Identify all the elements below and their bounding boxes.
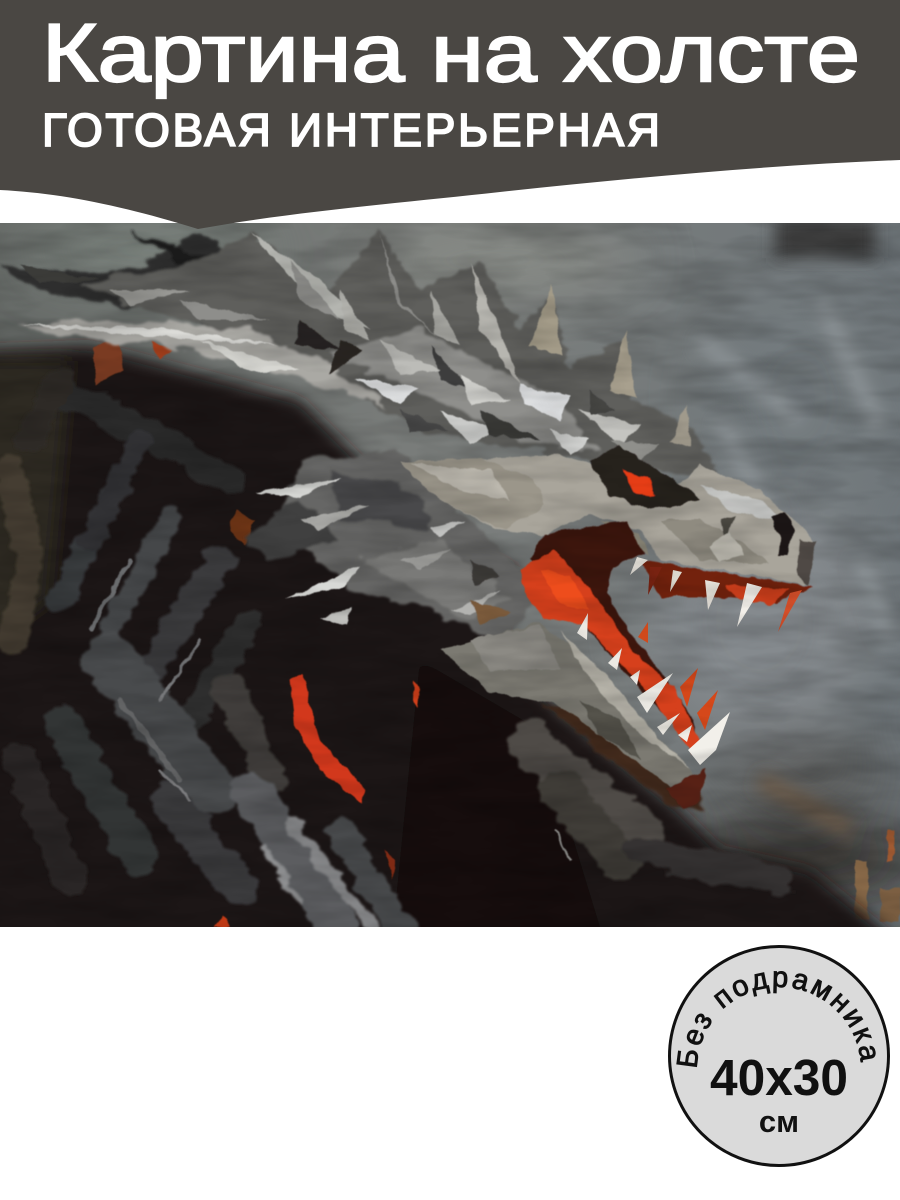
badge unit: см [759, 1104, 799, 1139]
teeth [577, 557, 802, 765]
crest and horns [0, 232, 720, 475]
fire glow in body [95, 340, 420, 927]
painting: dragon on canvas [0, 215, 900, 960]
nostril [770, 512, 794, 555]
subtitle: ГОТОВАЯ ИНТЕРЬЕРНАЯ [42, 104, 660, 156]
painting background [0, 215, 900, 927]
header banner [0, 0, 900, 229]
snout and ear [400, 455, 816, 586]
badge size: 40x30 [710, 1049, 848, 1106]
badge circle [670, 946, 888, 1166]
badge curved label: Без подрамника [676, 971, 876, 1068]
open mouth [520, 522, 813, 755]
brush texture overlay [0, 223, 900, 927]
title: Картина на холсте [42, 8, 860, 99]
lower jaw [440, 622, 705, 810]
neck scales [240, 450, 545, 640]
dragon body [0, 345, 900, 960]
eye [590, 445, 700, 510]
crest highlights and spikes [20, 232, 692, 460]
size badge [668, 945, 890, 1167]
